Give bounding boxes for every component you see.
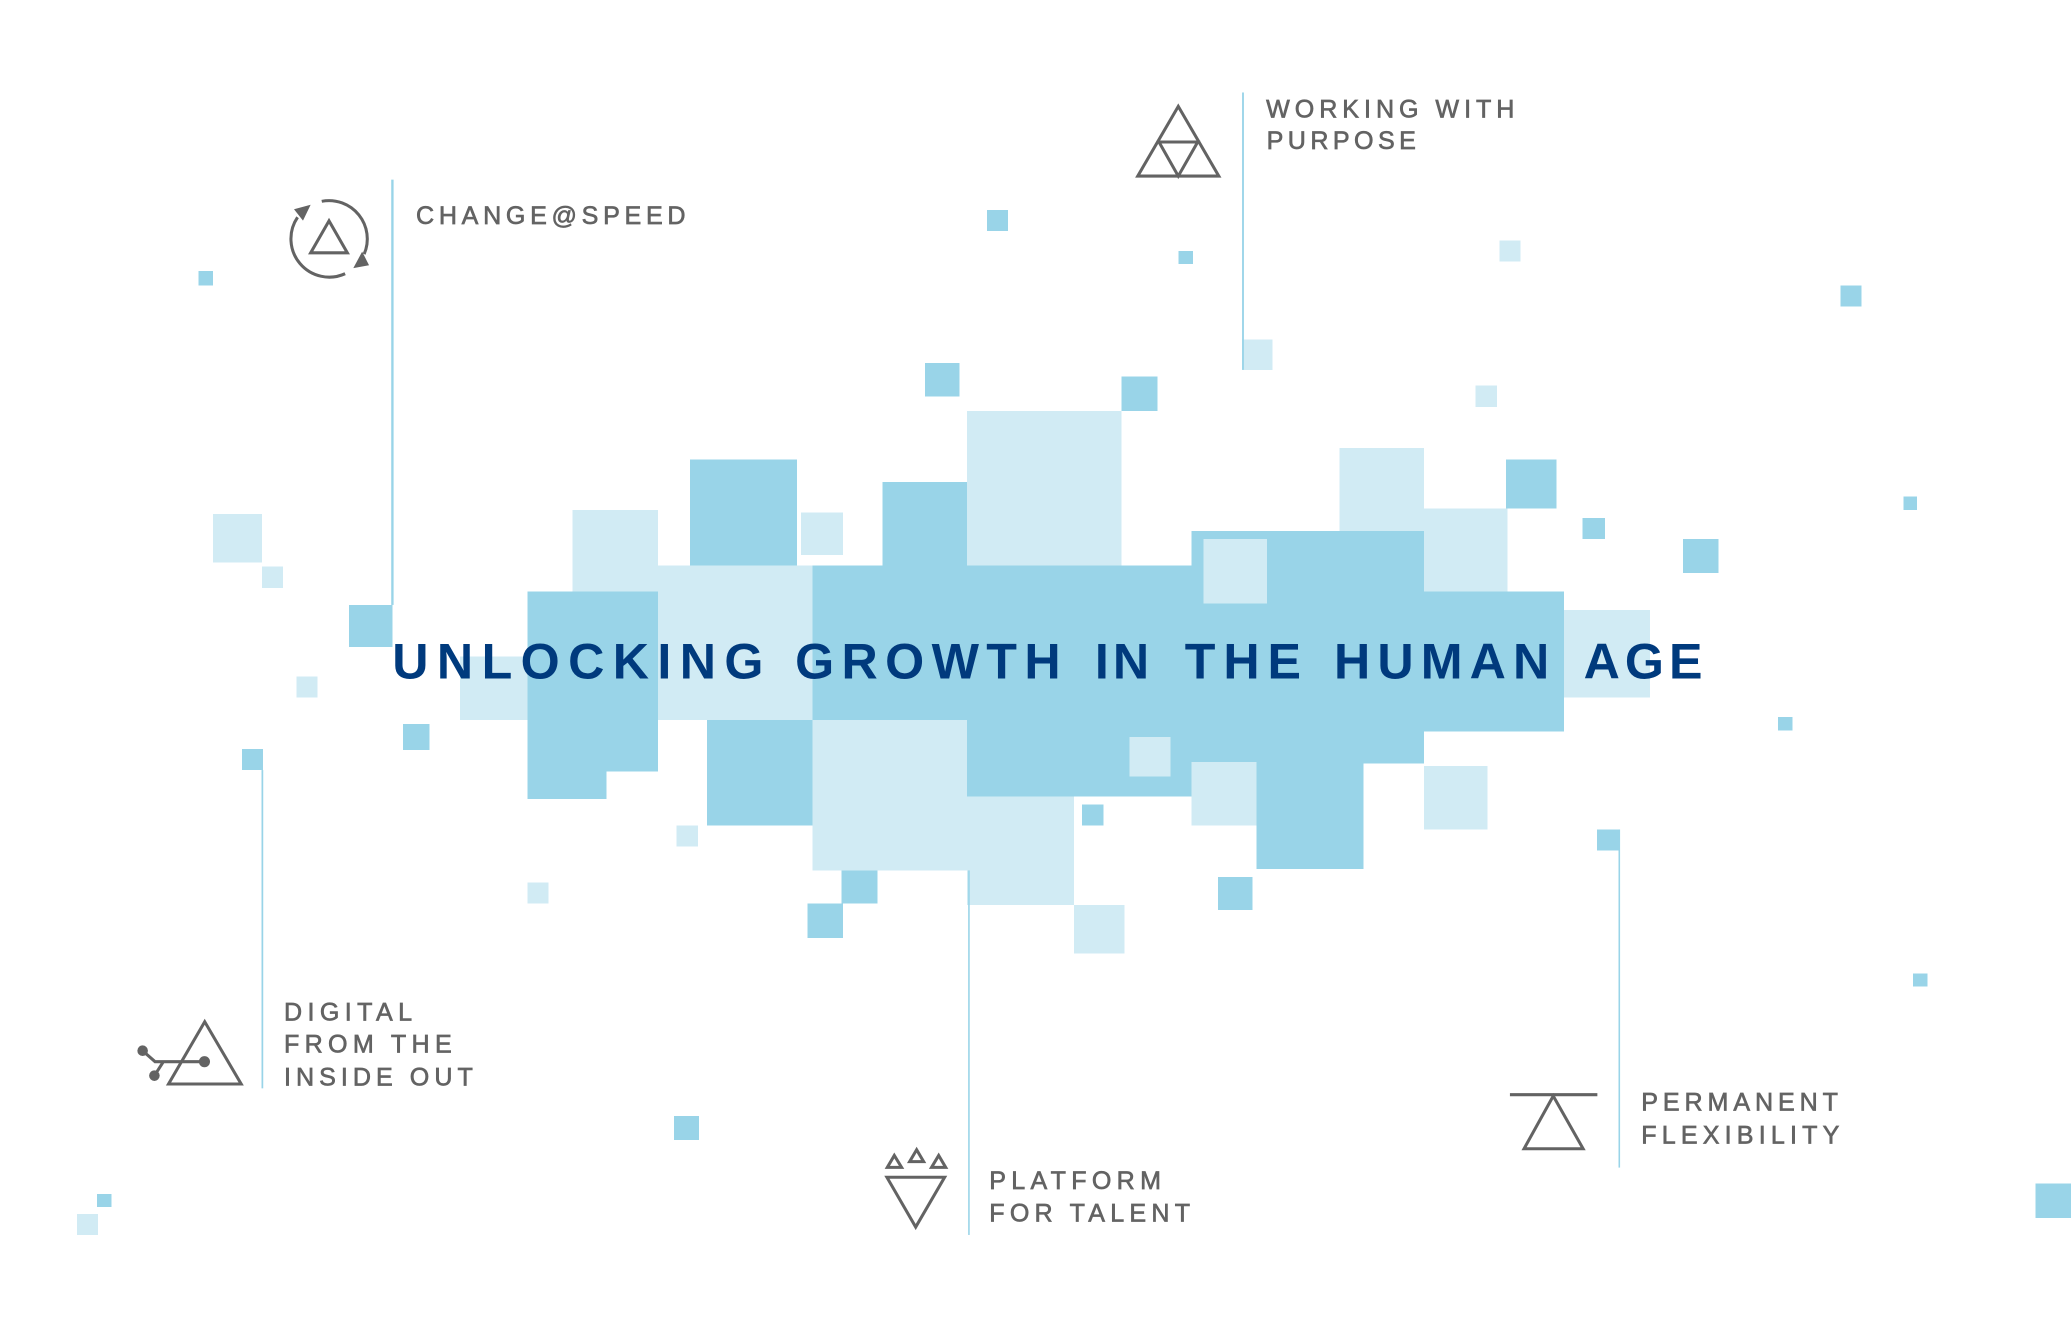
icon: circuit triangle (137, 1022, 241, 1084)
label (284, 999, 473, 1091)
title: THE (1185, 634, 1301, 690)
label: PLATFORM (989, 1167, 1161, 1195)
item: change@speed (291, 201, 685, 277)
graphic: light squares on top of cluster (1130, 539, 1267, 826)
item: platform for talent (887, 1150, 1190, 1228)
graphic: dark pixel cluster (527, 460, 1564, 869)
label: FLEXIBILITY (1641, 1121, 1840, 1149)
title: IN (1095, 634, 1149, 690)
icon: balancing triangle (1510, 1095, 1597, 1149)
graphic: light pixel cluster, back layer (460, 411, 1650, 954)
graphic: scattered dark squares (97, 210, 2071, 1218)
item: digital from the inside out (137, 999, 473, 1091)
label: FROM THE (284, 1031, 452, 1059)
label: FOR TALENT (989, 1200, 1190, 1228)
connector line: digital from the inside out (262, 770, 263, 1088)
icon: inverted triangle with three small triangles (887, 1150, 946, 1227)
icon: triangle with rotating arrows (291, 201, 369, 277)
icon: nested triangles (1138, 106, 1219, 176)
label (1266, 96, 1514, 155)
title (392, 634, 1702, 690)
connector line: platform for talent (968, 870, 970, 1235)
connector line: working with purpose (1242, 92, 1244, 370)
item: working with purpose (1138, 96, 1514, 176)
label: DIGITAL (284, 999, 412, 1027)
item: permanent flexibility (1510, 1089, 1840, 1149)
label (989, 1167, 1190, 1228)
label: CHANGE@SPEED (416, 202, 685, 230)
label: PURPOSE (1267, 127, 1416, 155)
connector line: permanent flexibility (1618, 829, 1620, 1168)
connector line: change@speed (391, 180, 394, 605)
label: INSIDE OUT (284, 1063, 473, 1091)
label (1641, 1089, 1840, 1149)
label: PERMANENT (1641, 1089, 1838, 1117)
graphic: scattered light squares (77, 240, 1521, 1235)
title: AGE (1584, 634, 1702, 690)
title: HUMAN (1334, 634, 1549, 690)
label: WORKING WITH (1266, 96, 1514, 124)
title: UNLOCKING (392, 634, 763, 690)
title: GROWTH (795, 634, 1061, 690)
